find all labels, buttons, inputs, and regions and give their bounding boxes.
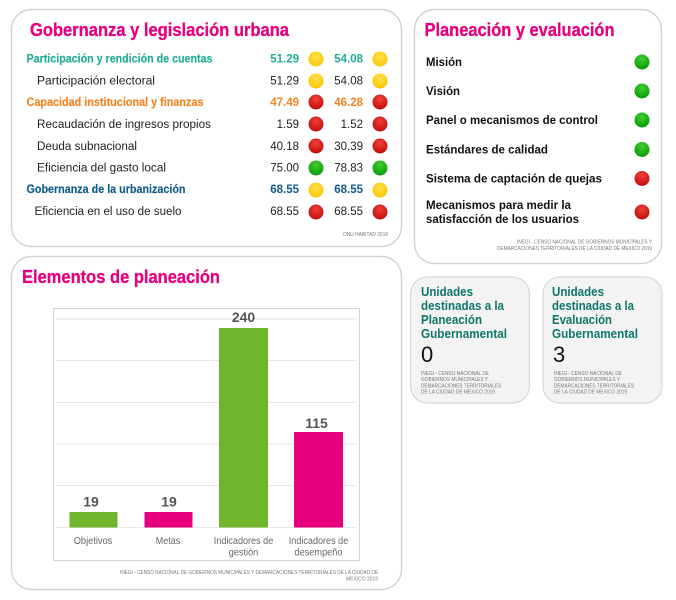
row: Eficiencia del gasto local: 78.83 <box>334 162 363 174</box>
row: Participación electoral: 54.08 <box>334 76 363 88</box>
bar: Indicadores de gestión 240: 240 <box>232 309 255 325</box>
source: INEGI: MEXICO 2019 <box>346 576 378 582</box>
source: INEGI: INEGI - CENSO NACIONAL DE <box>421 371 490 377</box>
source: ONU Habitat: ONU HABITAD 2018 <box>343 232 388 238</box>
bar chart <box>54 308 360 560</box>
row: Eficiencia en el uso de suelo: 68.55 <box>270 206 299 218</box>
bar: Objetivos 19: 19 <box>83 494 99 510</box>
source: INEGI: DEMARCACIONES TERRITORIALES <box>421 384 502 390</box>
bar: Metas 19: 19 <box>161 494 177 510</box>
row: Capacidad institucional y finanzas: 47.49 <box>270 97 299 109</box>
row: Estándares de calidad: Estándares de calidad <box>426 142 548 156</box>
row: Participación y rendición de cuentas <box>26 52 388 66</box>
row: Eficiencia del gasto local: 75.00 <box>270 162 299 174</box>
bar: Metas 19: Metas <box>156 536 180 547</box>
value: 3: 3 <box>553 342 565 367</box>
row: Recaudación de ingresos propios: 1.52 <box>341 119 363 131</box>
heading: Planeación y evaluación: Planeación y evaluación <box>424 19 614 40</box>
row: Participación electoral: Participación electoral <box>37 76 155 88</box>
source: INEGI <box>421 371 502 396</box>
bar: Objetivos 19: Objetivos <box>74 536 112 547</box>
heading: Unidades destinadas a la Planeación Gubernamental: Unidades <box>421 285 473 299</box>
source: INEGI: DE LA CIUDAD DE MEXICO 2019 <box>554 390 627 396</box>
bar: Indicadores de gestión 240: Indicadores de <box>214 536 274 547</box>
row: Deuda subnacional: Deuda subnacional <box>37 141 137 153</box>
panel: Planeación y evaluación <box>414 10 662 264</box>
row: Panel o mecanismos de control: Panel o mecanismos de control <box>426 113 598 127</box>
row: Capacidad institucional y finanzas: Capacidad institucional y finanzas <box>26 95 204 109</box>
bar: Objetivos 19 <box>70 494 118 547</box>
row: Deuda subnacional: 30.39 <box>334 141 363 153</box>
row: Recaudación de ingresos propios: Recaudación de ingresos propios <box>37 119 211 131</box>
source: INEGI: DEMARCACIONES TERRITORIALES DE LA CIUDAD DE MEXICO 2019 <box>497 246 652 252</box>
value: 0: 0 <box>421 342 433 367</box>
row: Gobernanza de la urbanización: 68.55 <box>334 184 364 196</box>
heading: Unidades destinadas a la Planeación Gubernamental <box>421 285 507 341</box>
panel: Elementos de planeación <box>12 256 402 590</box>
row: Capacidad institucional y finanzas: 46.28 <box>334 97 364 109</box>
row: Participación y rendición de cuentas: Participación y rendición de cuentas <box>26 52 213 66</box>
row: Gobernanza de la urbanización <box>26 182 388 198</box>
row: Visión <box>426 84 650 98</box>
row: Eficiencia en el uso de suelo: Eficiencia en el uso de suelo <box>34 206 182 218</box>
row: Participación electoral: 51.29 <box>270 76 299 88</box>
heading: Unidades destinadas a la Evaluación Gubernamental: destinadas a la <box>552 299 635 313</box>
heading: Unidades destinadas a la Evaluación Gubernamental: Unidades <box>552 285 604 299</box>
row: Participación y rendición de cuentas: 51.29 <box>270 54 299 66</box>
row: Participación electoral <box>37 74 388 88</box>
row: Eficiencia del gasto local <box>37 160 388 176</box>
source: INEGI <box>554 371 635 396</box>
heading: Unidades destinadas a la Planeación Gubernamental: destinadas a la <box>421 299 505 313</box>
heading: Unidades destinadas a la Planeación Gubernamental: Gubernamental <box>421 327 507 341</box>
row: Gobernanza de la urbanización: Gobernanza de la urbanización <box>26 182 186 196</box>
source: INEGI: INEGI - CENSO NACIONAL DE GOBIERNOS MUNICIPALES Y DEMARCACIONES TERRITORIALES DE LA CIUDAD DE <box>120 570 379 576</box>
row: Deuda subnacional <box>37 138 388 154</box>
row: Mecanismos para medir la satisfacción de los usuarios: satisfacción de los usuarios <box>426 212 579 226</box>
row: Misión <box>426 54 650 70</box>
row: Eficiencia del gasto local: Eficiencia del gasto local <box>37 162 166 174</box>
row: Misión: Misión <box>426 55 462 69</box>
source: INEGI <box>497 240 653 252</box>
heading: Unidades destinadas a la Evaluación Gubernamental: Gubernamental <box>552 327 638 341</box>
panel: Unidades de evaluación <box>543 277 662 403</box>
source: INEGI: INEGI - CENSO NACIONAL DE <box>554 371 623 377</box>
row: Recaudación de ingresos propios <box>37 116 388 132</box>
row: Recaudación de ingresos propios: 1.59 <box>277 119 299 131</box>
bar: Indicadores de desempeño 115: 115 <box>305 415 328 431</box>
bar: Indicadores de gestión 240 <box>214 309 274 558</box>
heading: Elementos de planeación: Elementos de planeación <box>22 266 220 287</box>
panel: Unidades de planeación <box>410 277 530 403</box>
bar: Indicadores de desempeño 115: Indicadores de <box>289 536 349 547</box>
source: INEGI: GOBIERNOS MUNICIPALES Y <box>421 377 489 383</box>
bar: Metas 19 <box>144 494 192 547</box>
source: INEGI: INEGI - CENSO NACIONAL DE GOBIERNOS MUNICIPALES Y <box>517 240 653 246</box>
panel: Gobernanza y legislación urbana <box>12 10 402 246</box>
bar: Indicadores de gestión 240: gestión <box>229 548 258 558</box>
row: Eficiencia en el uso de suelo <box>34 204 388 220</box>
bar: Indicadores de desempeño 115 <box>289 415 349 558</box>
heading: Unidades destinadas a la Evaluación Gubernamental <box>552 285 638 341</box>
row: Deuda subnacional: 40.18 <box>270 141 299 153</box>
heading: Unidades destinadas a la Evaluación Gubernamental: Evaluación <box>552 313 612 327</box>
row: Capacidad institucional y finanzas <box>26 94 388 110</box>
source: INEGI: DEMARCACIONES TERRITORIALES <box>554 384 635 390</box>
row: Gobernanza de la urbanización: 68.55 <box>270 184 300 196</box>
source: INEGI <box>120 570 379 582</box>
bar: Indicadores de desempeño 115: desempeño <box>294 548 343 558</box>
row: Mecanismos para medir la satisfacción de los usuarios <box>426 198 650 226</box>
row: Participación y rendición de cuentas: 54.08 <box>334 54 364 66</box>
row: Eficiencia en el uso de suelo: 68.55 <box>334 206 363 218</box>
heading: Unidades destinadas a la Planeación Gubernamental: Planeación <box>421 313 482 327</box>
row: Mecanismos para medir la satisfacción de los usuarios: Mecanismos para medir la <box>426 198 571 212</box>
row: Estándares de calidad <box>426 142 650 157</box>
source: INEGI: GOBIERNOS MUNICIPALES Y <box>554 377 621 383</box>
source: INEGI: DE LA CIUDAD DE MEXICO 2019 <box>421 390 495 396</box>
heading: Gobernanza y legislación urbana: Gobernanza y legislación urbana <box>30 19 290 40</box>
row: Sistema de captación de quejas: Sistema de captación de quejas <box>426 172 602 186</box>
row: Visión: Visión <box>426 84 460 98</box>
